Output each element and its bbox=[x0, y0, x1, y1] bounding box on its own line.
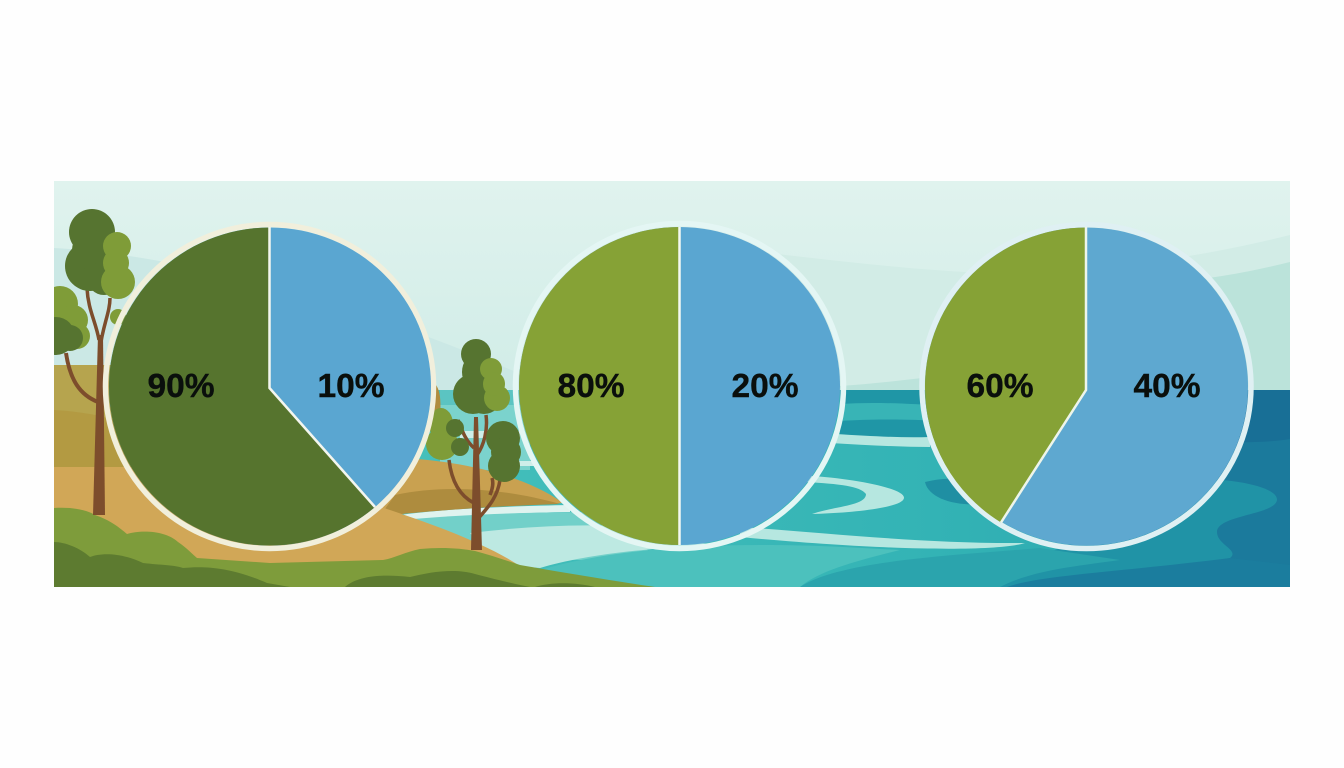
tree: small left bbox=[54, 286, 96, 404]
tree: tall left bbox=[65, 209, 135, 515]
distant hills bbox=[54, 235, 1290, 400]
slice: 60% bbox=[925, 228, 1086, 522]
label: 60%: 60% bbox=[966, 368, 1034, 405]
sand spit bbox=[54, 467, 517, 564]
water bbox=[400, 390, 1290, 587]
landscape panel bbox=[37, 181, 1290, 587]
slice: 80% bbox=[519, 227, 680, 545]
label: 10%: 10% bbox=[317, 368, 385, 405]
label: 20%: 20% bbox=[731, 368, 799, 405]
grass mounds bbox=[54, 508, 655, 587]
slice: 20% bbox=[519, 227, 840, 545]
sky bbox=[54, 181, 1290, 374]
pie chart: 90% / 10% bbox=[106, 224, 434, 548]
label: 40%: 40% bbox=[1133, 368, 1201, 405]
slice: 10% bbox=[109, 228, 431, 546]
right hills bbox=[380, 458, 563, 516]
label: 90%: 90% bbox=[147, 368, 215, 405]
pie chart: 80% / 20% bbox=[516, 224, 844, 548]
slice: 40% bbox=[925, 228, 1248, 546]
slice: 90% bbox=[109, 228, 375, 546]
pie chart: 60% / 40% bbox=[922, 224, 1251, 548]
streams bbox=[830, 434, 930, 447]
left shore bbox=[54, 365, 655, 587]
label: 80%: 80% bbox=[557, 368, 625, 405]
tree: right of first pie bbox=[426, 339, 521, 550]
